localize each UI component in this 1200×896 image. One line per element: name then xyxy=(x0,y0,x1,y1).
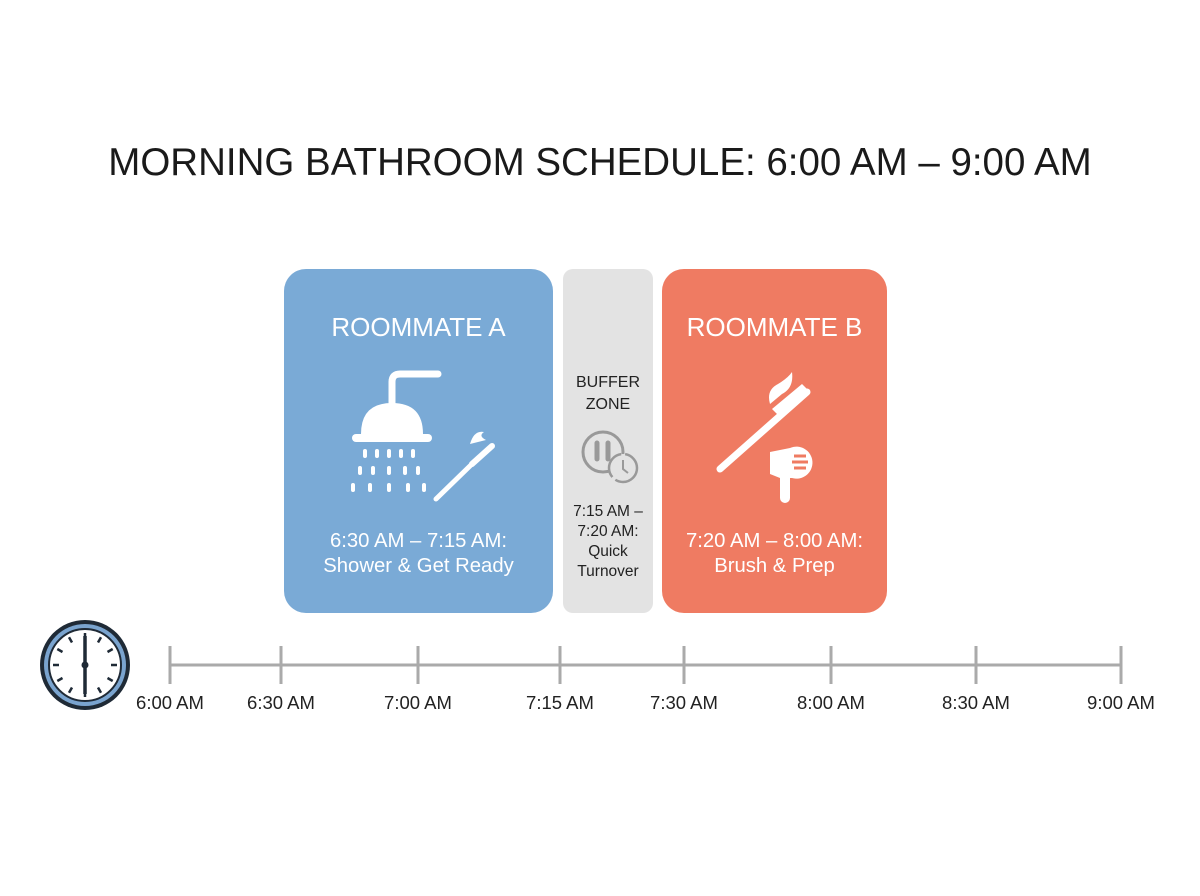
text: buffer time: Quick xyxy=(588,543,628,560)
heading buffer: ZONE xyxy=(586,396,630,413)
timeline labels: 7:00 AM xyxy=(384,692,452,713)
heading A: ROOMMATE A xyxy=(331,312,506,342)
panel: roommate A xyxy=(284,269,553,613)
title: MORNING BATHROOM SCHEDULE: 6:00 AM – 9:00 AM xyxy=(108,141,1092,184)
timeline labels: 7:30 AM xyxy=(650,692,718,713)
timeline labels: 6:00 AM xyxy=(136,692,204,713)
heading buffer: BUFFER xyxy=(576,374,640,391)
text: buffer time: 7:15 AM – xyxy=(573,503,643,520)
text: B time: Brush & Prep xyxy=(714,555,835,577)
icon: toothbrush and hairdryer xyxy=(716,372,812,503)
timeline labels: 9:00 AM xyxy=(1087,692,1155,713)
text: B time xyxy=(686,530,863,577)
text: A time: Shower & Get Ready xyxy=(323,555,514,577)
text: A time xyxy=(323,530,514,577)
timeline axis xyxy=(168,646,1122,684)
timeline labels: 8:00 AM xyxy=(797,692,865,713)
text: buffer time: 7:20 AM: xyxy=(577,523,639,540)
panel: roommate B xyxy=(662,269,887,613)
icon: shower and toothbrush xyxy=(351,370,495,502)
text: B time: 7:20 AM – 8:00 AM: xyxy=(686,530,863,552)
timeline labels: 8:30 AM xyxy=(942,692,1010,713)
text: buffer time xyxy=(573,503,643,580)
panel: buffer zone xyxy=(563,269,653,613)
timeline labels: 6:30 AM xyxy=(247,692,315,713)
icon: clock xyxy=(40,620,130,710)
text: A time: 6:30 AM – 7:15 AM: xyxy=(330,530,507,552)
icon: pause clock xyxy=(582,430,638,484)
timeline labels: 7:15 AM xyxy=(526,692,594,713)
heading buffer xyxy=(576,374,640,413)
text: buffer time: Turnover xyxy=(577,563,639,580)
heading B: ROOMMATE B xyxy=(687,312,862,342)
